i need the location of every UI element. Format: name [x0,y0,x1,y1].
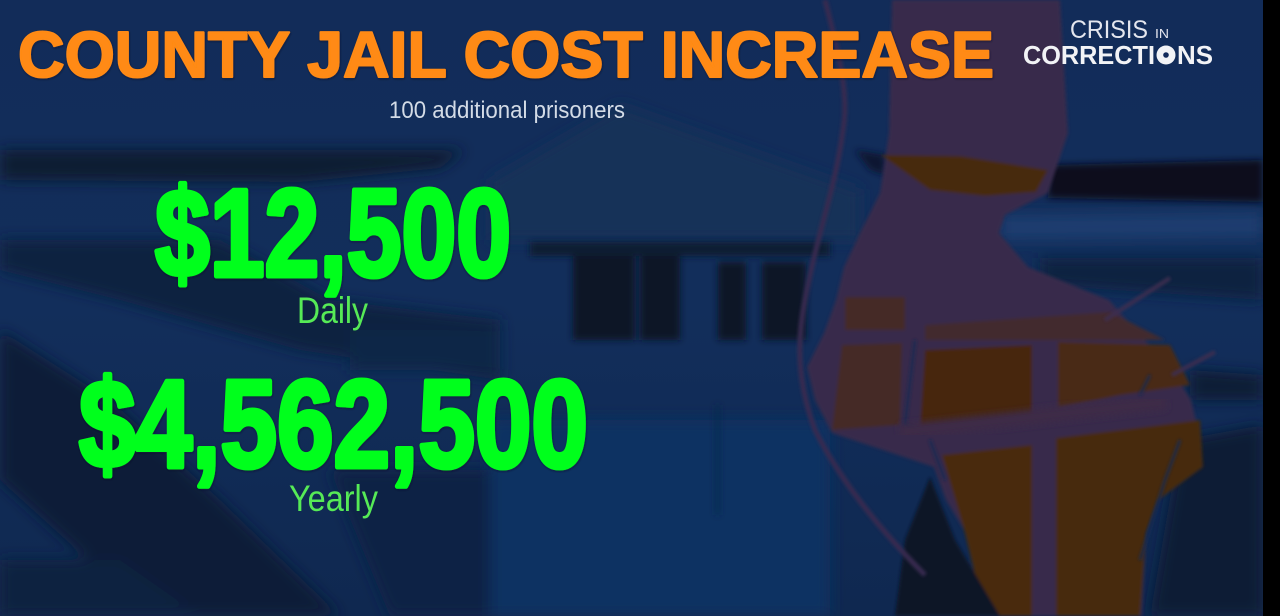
figure: daily cost: $12,500 [155,165,511,303]
map: pale land area of the panhandle and peninsula [807,0,1203,616]
logo text: in: IN [1155,27,1169,41]
label: daily: Daily [297,290,368,331]
figure: yearly cost: $4,562,500 [79,356,588,494]
label: yearly: Yearly [289,478,378,519]
map: orange county blocks [920,345,1032,428]
map: coastline water [895,477,1000,616]
logo text: ns: NS [1177,40,1213,70]
logo: Crisis in Corrections [1023,16,1213,70]
right edge black strip [1263,0,1280,616]
map: Florida silhouette overlay [800,0,1215,616]
logo text: crisis: CRISIS [1070,16,1148,44]
title: COUNTY JAIL COST INCREASE [18,18,994,91]
logo icon: solid O with keyhole [1156,46,1176,64]
logo text: correcti: CORRECTI [1023,40,1155,70]
subtitle: 100 additional prisoners [389,97,625,124]
map: orange band near the top [881,155,1048,196]
